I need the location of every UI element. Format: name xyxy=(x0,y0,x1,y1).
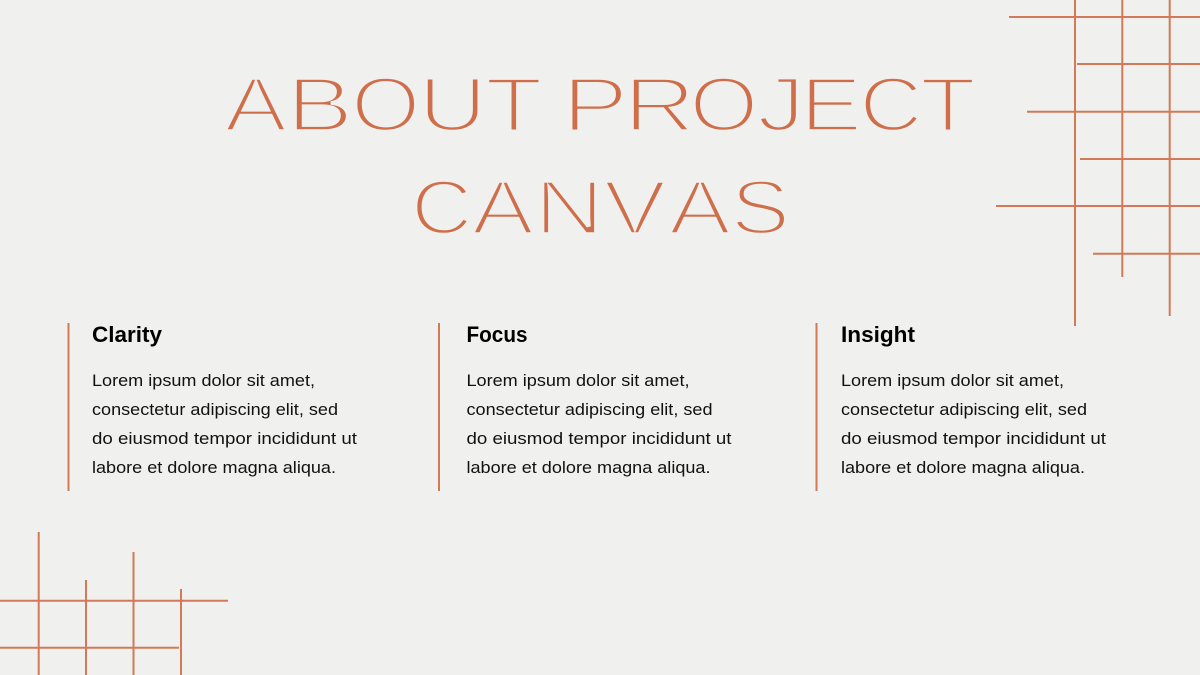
panel: insight: Insight xyxy=(841,322,916,347)
panel: focus: consectetur adipiscing elit, sed xyxy=(466,400,712,419)
title: J xyxy=(757,62,805,148)
panel: clarity: Clarity xyxy=(92,322,163,347)
panel: insight: labore et dolore magna aliqua. xyxy=(841,458,1085,477)
panel: insight: do eiusmod tempor incididunt ut xyxy=(841,429,1106,448)
panel: insight: Lorem ipsum dolor sit amet, xyxy=(841,371,1064,390)
panel: insight xyxy=(816,322,1106,491)
title xyxy=(224,62,976,251)
decorative grid: bottom left xyxy=(0,532,228,675)
title: T xyxy=(920,62,976,148)
panel: clarity: labore et dolore magna aliqua. xyxy=(92,458,336,477)
panel: focus: Focus xyxy=(466,322,528,347)
panel: focus: labore et dolore magna aliqua. xyxy=(466,458,710,477)
decorative grid: top right xyxy=(996,0,1200,326)
title: R xyxy=(623,62,696,148)
panel: clarity: Lorem ipsum dolor sit amet, xyxy=(92,371,315,390)
title: O xyxy=(690,62,758,148)
title: U xyxy=(418,62,487,148)
title: S xyxy=(731,165,790,251)
title: N xyxy=(534,165,604,251)
panel: clarity: do eiusmod tempor incididunt ut xyxy=(92,429,357,448)
title: E xyxy=(800,62,862,148)
panel: clarity xyxy=(68,322,357,491)
title: A xyxy=(669,165,732,251)
title: O xyxy=(351,62,420,148)
title: C xyxy=(411,165,472,251)
title: B xyxy=(286,62,353,148)
panel: focus: do eiusmod tempor incididunt ut xyxy=(466,429,732,448)
panel: focus xyxy=(439,322,732,491)
title: C xyxy=(859,62,922,148)
title: P xyxy=(562,62,628,148)
title: V xyxy=(604,165,667,251)
panel: focus: Lorem ipsum dolor sit amet, xyxy=(466,371,690,390)
title: A xyxy=(224,62,288,148)
panel: clarity: consectetur adipiscing elit, sed xyxy=(92,400,338,419)
title: T xyxy=(485,62,541,148)
title: A xyxy=(472,165,535,251)
panel: insight: consectetur adipiscing elit, sed xyxy=(841,400,1087,419)
